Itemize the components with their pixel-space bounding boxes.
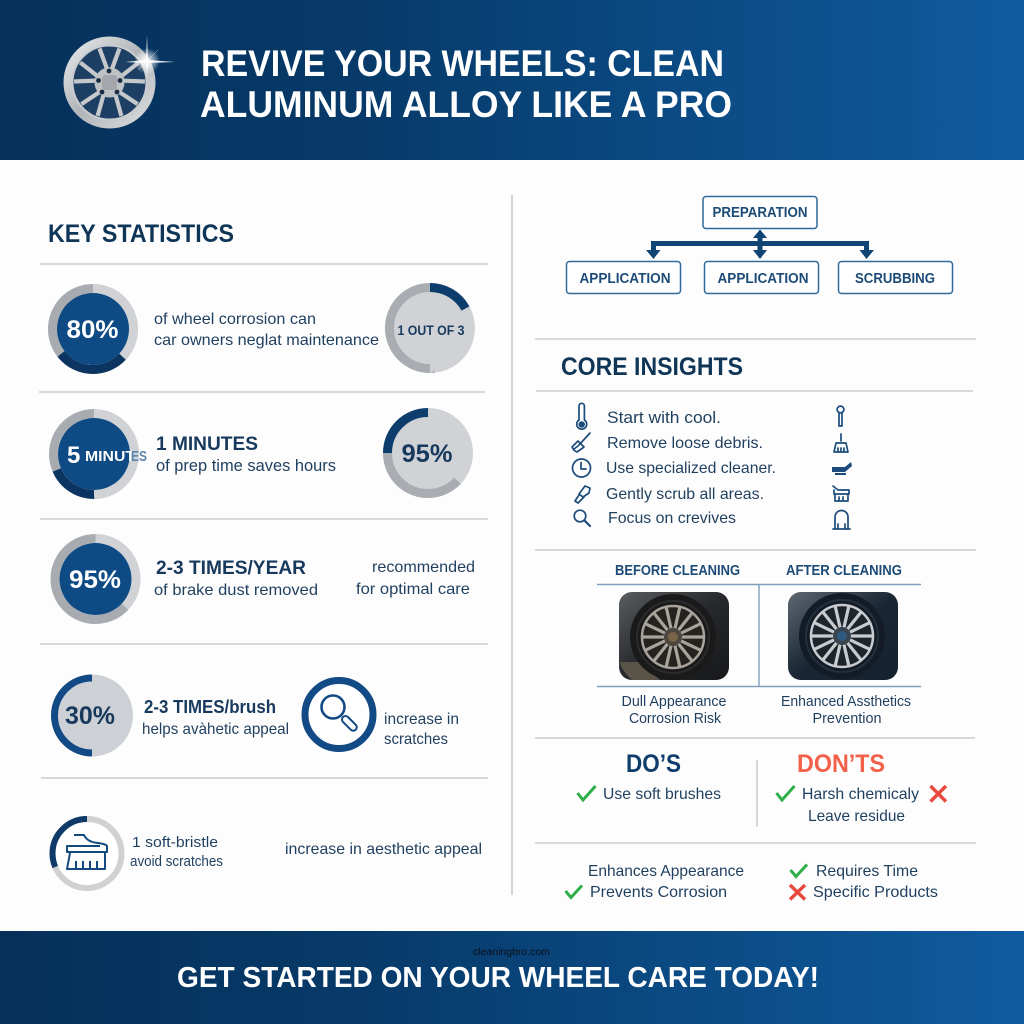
stat text: recommended — [356, 559, 475, 598]
stat: 95% blue ring: 95% — [69, 566, 121, 594]
stat text: scratches: increase in — [384, 711, 459, 728]
cons list: Specific Products — [813, 884, 938, 901]
box: application 2: APPLICATION — [718, 271, 808, 287]
stat text: prep time — [156, 434, 336, 475]
stat: 80% ring: 80% — [66, 316, 118, 344]
flowchart — [566, 196, 952, 294]
box: application 1: APPLICATION — [580, 271, 670, 287]
heading: donts: DON’TS — [797, 750, 885, 778]
stat text: recommended: for optimal care — [356, 581, 470, 598]
heading: key statistics: KEY STATISTICS — [48, 220, 234, 248]
stat text: brush — [142, 697, 289, 738]
stat: 5 minutes ring: MINUT — [85, 448, 135, 465]
pros list: Prevents Corrosion — [590, 884, 727, 901]
stat: 5 minutes ring — [54, 414, 147, 494]
check: harsh chemicals — [776, 786, 794, 800]
caption: after: Enhanced Assthetics — [781, 694, 911, 710]
photo: dull wheel — [619, 592, 729, 680]
insights list: Focus on crevives — [608, 510, 736, 527]
cons list: Requires Time — [816, 863, 918, 880]
icon: small sprayer — [832, 462, 852, 475]
icon: thermometer — [577, 403, 587, 429]
stat text: wheel corrosion — [154, 311, 379, 349]
panel: pros and cons — [566, 863, 938, 901]
source credit: cleaningbro.com — [473, 946, 550, 958]
stat text: brake dust — [154, 558, 318, 599]
dont items: Leave residue — [808, 808, 905, 825]
stat text: wheel corrosion: of wheel corrosion can — [154, 311, 316, 328]
stat text: brake dust: of brake dust removed — [154, 582, 318, 599]
stat: 30% ring: 30% — [65, 702, 115, 730]
stat text: wheel corrosion: car owners neglat maintenance — [154, 332, 379, 349]
dont items: Harsh chemicaly — [802, 786, 919, 803]
call to action: GET STARTED ON YOUR WHEEL CARE TODAY! — [177, 962, 819, 994]
stat text: soft-bristle: 1 soft-bristle — [132, 834, 218, 851]
photo: clean wheel — [788, 592, 898, 680]
footer banner — [0, 931, 1024, 1024]
stat text: prep time: 1 MINUTES — [156, 434, 258, 455]
cross: specific products — [790, 885, 805, 900]
check: soft brushes — [578, 786, 596, 800]
icon: small broom — [834, 434, 848, 452]
stat: 1 out of 3 ring: 1 OUT OF 3 — [398, 322, 465, 338]
insights list: Remove loose debris. — [607, 435, 763, 452]
stat text: prep time: of prep time saves hours — [156, 457, 336, 475]
insights list: Use specialized cleaner. — [606, 460, 776, 477]
heading: before: BEFORE CLEANING — [615, 563, 740, 579]
stat: 95% blue ring — [55, 538, 136, 620]
caption: before — [622, 694, 726, 727]
box: scrubbing — [838, 262, 952, 294]
title: REVIVE YOUR WHEELS: CLEAN — [201, 43, 724, 84]
insights list: Start with cool. — [607, 408, 721, 427]
stat: 30% ring — [51, 674, 133, 756]
stat text: brush: 2-3 TIMES/brush — [144, 697, 276, 717]
stat text: brush: helps avàhetic appeal — [142, 721, 289, 738]
box: preparation: PREPARATION — [712, 205, 808, 221]
caption: before: Corrosion Risk — [629, 711, 722, 727]
check: requires time — [790, 864, 807, 876]
panel: before and after — [597, 563, 921, 727]
stat text: soft-bristle: avoid scratches — [130, 853, 223, 870]
icon: small wand — [837, 406, 844, 426]
stat: 1 out of 3 ring — [385, 283, 475, 373]
icon: scrub brush — [575, 486, 590, 503]
stat: 5 minutes ring: 5 — [67, 442, 80, 469]
stat: 95% gray ring — [383, 408, 473, 498]
icon: clock — [572, 459, 590, 477]
insights list: Gently scrub all areas. — [606, 486, 764, 503]
stat text: brake dust: 2-3 TIMES/YEAR — [156, 558, 306, 579]
panel: core insights — [561, 353, 852, 529]
icon: magnifier — [574, 510, 590, 526]
box: preparation — [703, 196, 817, 228]
caption: after — [781, 694, 911, 727]
header banner — [0, 0, 1024, 160]
panel: dos and donts — [578, 750, 946, 827]
stat: 95% gray ring: 95% — [402, 440, 452, 468]
stat text: recommended: recommended — [372, 559, 475, 576]
box: application 1 — [566, 262, 680, 294]
heading: after: AFTER CLEANING — [786, 563, 902, 579]
check: prevents corrosion — [566, 886, 582, 898]
dont items — [802, 786, 919, 825]
stat: 5 minutes ring: ES — [131, 448, 147, 465]
icon: small brush — [833, 486, 849, 501]
heading: dos: DO’S — [626, 750, 681, 778]
cross: harsh chemicals — [930, 786, 946, 802]
title: ALUMINUM ALLOY LIKE A PRO — [200, 84, 732, 125]
flow arrows — [646, 230, 874, 259]
stat text: aesthetic appeal: increase in aesthetic appeal — [285, 841, 482, 858]
pros list: Enhances Appearance — [588, 863, 744, 880]
pros list — [588, 863, 744, 901]
icon: small glove — [833, 511, 850, 529]
caption: after: Prevention — [812, 711, 882, 727]
icon: shiny alloy wheel — [64, 35, 175, 128]
stat text: scratches: scratches — [384, 731, 448, 748]
icon: magnifier in ring — [305, 680, 373, 748]
stat: 80% ring — [48, 284, 138, 374]
stat text: soft-bristle — [130, 834, 223, 870]
title — [200, 43, 732, 125]
icon: brush in ring — [52, 819, 122, 888]
cons list — [813, 863, 938, 901]
icon: broom — [572, 433, 590, 452]
caption: before: Dull Appearance — [622, 694, 726, 710]
heading: core insights: CORE INSIGHTS — [561, 353, 743, 381]
box: scrubbing: SCRUBBING — [855, 271, 935, 287]
box: application 2 — [704, 262, 818, 294]
stat text: scratches — [384, 711, 459, 748]
insights list — [606, 408, 776, 527]
panel: key statistics — [39, 220, 488, 888]
do item: Use soft brushes — [603, 786, 721, 803]
